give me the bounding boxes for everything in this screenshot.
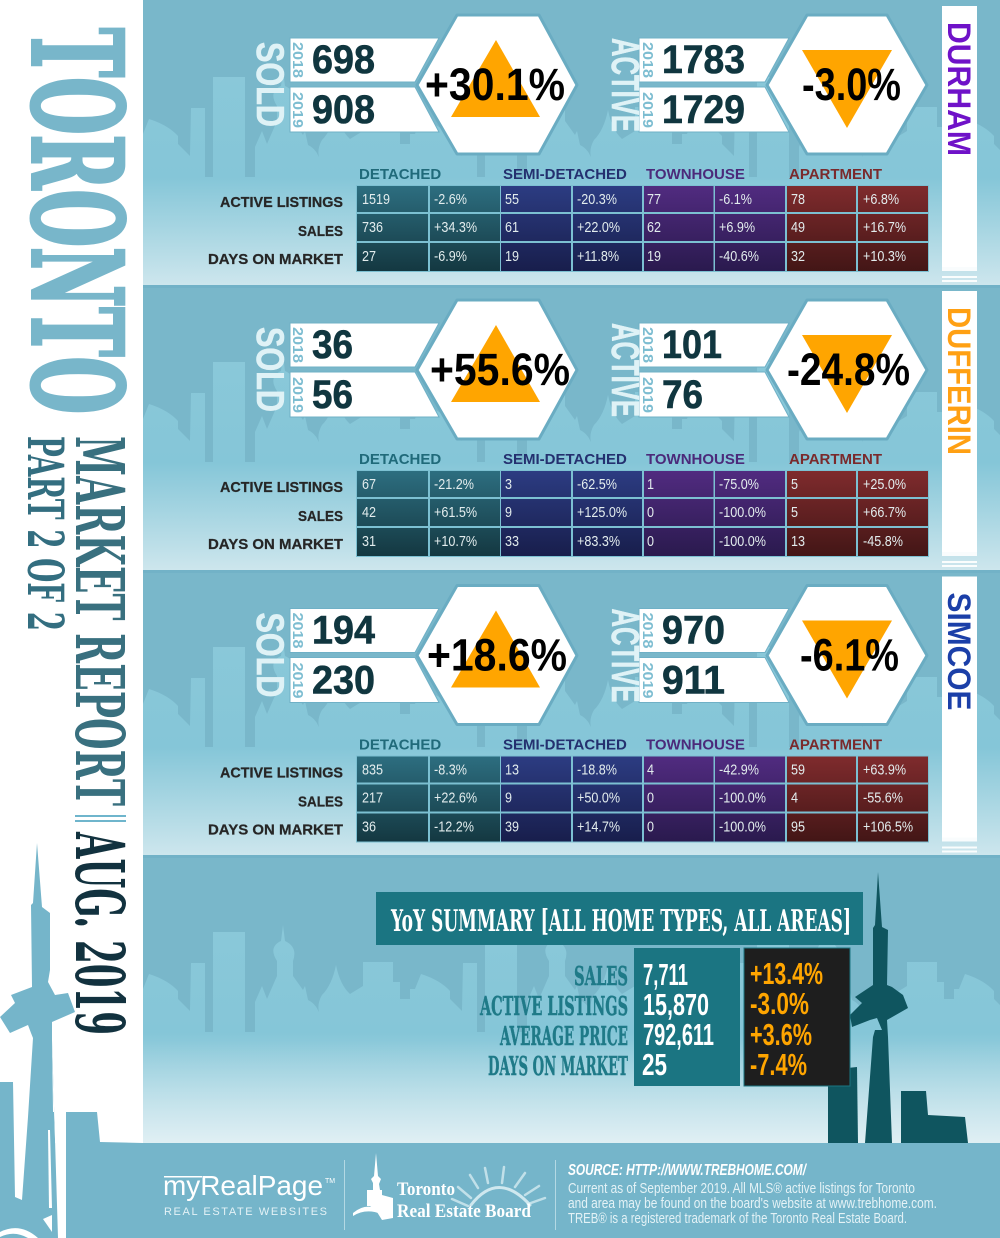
table: Simcoe: SEMI-DETACHED xyxy=(503,736,627,754)
table: Dufferin: 9 xyxy=(505,503,512,520)
active years: 2018 xyxy=(639,42,656,78)
left column blue CN Tower and skyline xyxy=(0,843,143,1238)
summary values box: 15,870 xyxy=(643,987,709,1022)
table: Simcoe: -8.3% xyxy=(434,760,467,778)
table: Simcoe: +106.5% xyxy=(863,817,913,835)
table: Simcoe: 4 xyxy=(647,760,654,778)
table: Dufferin: 3 xyxy=(505,475,512,492)
table: Dufferin: 5 xyxy=(791,475,798,492)
logo: myRealPage: TM xyxy=(325,1178,335,1185)
table: Simcoe: -42.9% xyxy=(719,760,759,778)
region label: Simcoe: SIMCOE xyxy=(941,592,977,710)
sold years: 2019 xyxy=(289,662,306,698)
title: Toronto: TORONTO xyxy=(3,28,148,414)
table: Simcoe: 95 xyxy=(791,817,805,835)
table: Durham: TOWNHOUSE xyxy=(646,166,745,183)
title: Aug. 2019: AUG. 2019 xyxy=(60,831,139,1035)
table: Dufferin: -45.8% xyxy=(863,532,903,549)
sold values xyxy=(312,323,353,417)
table: Durham: 62 xyxy=(647,218,661,235)
summary values box xyxy=(634,948,740,1086)
table: Durham: DETACHED xyxy=(359,166,441,183)
table: Durham: +10.3% xyxy=(863,247,906,264)
active change: down triangle: -6.1% xyxy=(800,630,899,680)
table: Dufferin: TOWNHOUSE xyxy=(646,451,745,468)
table: Durham: +6.8% xyxy=(863,190,899,207)
table: Simcoe: APARTMENT xyxy=(789,736,882,754)
active values xyxy=(662,38,745,132)
table: Durham: 77 xyxy=(647,190,661,207)
sold years: 2018 xyxy=(289,42,306,78)
sold label: SOLD xyxy=(248,42,291,127)
table: Dufferin: ACTIVE LISTINGS xyxy=(220,479,343,496)
summary change box: +13.4% xyxy=(750,956,823,991)
summary row labels xyxy=(479,962,628,1082)
table: Simcoe: -12.2% xyxy=(434,817,474,835)
region label: Dufferin: DUFFERIN xyxy=(941,307,977,455)
active change: down triangle xyxy=(787,335,910,413)
sold years: 2018 xyxy=(289,327,306,363)
logo: myRealPage: REAL ESTATE WEBSITES xyxy=(164,1206,327,1218)
table: Durham: SEMI-DETACHED xyxy=(503,166,627,183)
title divider xyxy=(75,815,126,822)
table: Simcoe: 36 xyxy=(362,817,376,835)
panel: Simcoe xyxy=(208,576,977,852)
table: Durham: 1519 xyxy=(362,190,390,207)
table: Durham: SALES xyxy=(298,223,343,240)
sold values xyxy=(312,608,376,702)
source note xyxy=(568,1162,937,1227)
table: Dufferin: -75.0% xyxy=(719,475,759,492)
active values xyxy=(662,608,725,702)
sold values: 194 xyxy=(312,608,376,652)
table: Simcoe: +63.9% xyxy=(863,760,906,778)
table: Dufferin: 13 xyxy=(791,532,805,549)
active years xyxy=(639,327,656,413)
sold years xyxy=(289,612,306,698)
active change: down triangle: -3.0% xyxy=(802,59,901,110)
source note: TREB® is a registered trademark of the Toronto Real Estate Board. xyxy=(568,1211,907,1227)
logo: myRealPage: myRealPage xyxy=(163,1170,323,1201)
active years: 2018 xyxy=(639,612,656,648)
active change: down triangle xyxy=(802,50,901,128)
table: Durham: DAYS ON MARKET xyxy=(208,251,343,268)
panel: Dufferin xyxy=(208,291,977,567)
active label: ACTIVE xyxy=(603,323,646,417)
table: Durham: -40.6% xyxy=(719,247,759,264)
table: Simcoe: -100.0% xyxy=(719,817,766,835)
table: Simcoe: -55.6% xyxy=(863,788,903,806)
table: Dufferin: +125.0% xyxy=(577,503,627,520)
sold values xyxy=(312,38,375,132)
table: Simcoe: SALES xyxy=(298,794,343,810)
table: Simcoe: +50.0% xyxy=(577,788,620,806)
active values: 1729 xyxy=(662,88,745,132)
table: Dufferin: -62.5% xyxy=(577,475,617,492)
active label: ACTIVE xyxy=(603,38,646,132)
table: Dufferin: 67 xyxy=(362,475,376,492)
table: Dufferin xyxy=(208,451,929,557)
panel: YoY summary xyxy=(376,892,863,1086)
table: Dufferin: -100.0% xyxy=(719,532,766,549)
panel backgrounds with skyline xyxy=(143,0,1000,1143)
summary change box xyxy=(744,948,850,1086)
table: Dufferin: DAYS ON MARKET xyxy=(208,536,343,553)
table: Durham: 78 xyxy=(791,190,805,207)
icon: dark CN Tower and buildings xyxy=(828,872,968,1143)
sold label: SOLD xyxy=(248,612,291,698)
sold values: 698 xyxy=(312,38,375,82)
sold change: up triangle: +18.6% xyxy=(427,630,567,680)
active label: ACTIVE xyxy=(603,608,646,702)
table: Dufferin: APARTMENT xyxy=(789,451,882,468)
table: Durham: +34.3% xyxy=(434,218,477,235)
table: Dufferin: 1 xyxy=(647,475,654,492)
table: Durham: 55 xyxy=(505,190,519,207)
table: Dufferin: -100.0% xyxy=(719,503,766,520)
summary values box: 7,711 xyxy=(643,957,688,992)
table: Simcoe: 217 xyxy=(362,788,383,806)
table: Durham: 736 xyxy=(362,218,383,235)
subtitle: part 2 of 2: PART 2 OF 2 xyxy=(16,436,75,631)
summary title bar xyxy=(376,892,863,945)
table: Dufferin: SEMI-DETACHED xyxy=(503,451,627,468)
table: Simcoe: -18.8% xyxy=(577,760,617,778)
sold change: up triangle xyxy=(425,40,565,117)
table: Simcoe xyxy=(208,736,929,842)
active years: 2019 xyxy=(639,377,656,413)
sold values: 36 xyxy=(312,323,353,367)
table: Durham: 49 xyxy=(791,218,805,235)
title: market report: MARKET REPORT xyxy=(60,436,139,806)
sold values: 230 xyxy=(312,658,375,702)
summary change box: -3.0% xyxy=(750,986,809,1021)
sold years: 2019 xyxy=(289,92,306,128)
active change: down triangle xyxy=(800,620,899,698)
active values: 970 xyxy=(662,608,725,652)
summary row labels: DAYS ON MARKET xyxy=(488,1052,628,1082)
table: Durham: 19 xyxy=(647,247,661,264)
table: Dufferin: +25.0% xyxy=(863,475,906,492)
table: Durham: 61 xyxy=(505,218,519,235)
sold years xyxy=(289,42,306,128)
sold years: 2018 xyxy=(289,612,306,648)
table: Simcoe: +14.7% xyxy=(577,817,620,835)
logo: myRealPage xyxy=(163,1170,335,1218)
table: Simcoe: +22.6% xyxy=(434,788,477,806)
sold values: 908 xyxy=(312,88,375,132)
active years: 2019 xyxy=(639,92,656,128)
sold change: up triangle xyxy=(430,325,570,402)
sold change: up triangle: +30.1% xyxy=(425,59,565,110)
table: Simcoe: DETACHED xyxy=(359,736,441,754)
summary change box: -7.4% xyxy=(750,1047,807,1082)
table: Durham: -6.9% xyxy=(434,247,467,264)
table: Simcoe: 835 xyxy=(362,760,383,778)
table: Durham: 32 xyxy=(791,247,805,264)
logo: Toronto Real Estate Board: Toronto xyxy=(397,1179,455,1200)
table: Durham: -6.1% xyxy=(719,190,752,207)
table: Durham: +22.0% xyxy=(577,218,620,235)
summary row labels: AVERAGE PRICE xyxy=(499,1022,628,1052)
table: Dufferin: 0 xyxy=(647,503,654,520)
table: Dufferin: -21.2% xyxy=(434,475,474,492)
sold change: up triangle: +55.6% xyxy=(430,344,570,395)
sold change: up triangle xyxy=(427,610,567,688)
table: Simcoe: ACTIVE LISTINGS xyxy=(220,764,343,782)
logo: Toronto Real Estate Board xyxy=(353,1153,545,1222)
table: Simcoe: 59 xyxy=(791,760,805,778)
region label: Durham: DURHAM xyxy=(941,22,977,156)
icon: logo tower xyxy=(367,1153,393,1220)
table: Dufferin: +66.7% xyxy=(863,503,906,520)
table: Simcoe: 13 xyxy=(505,760,519,778)
sold years: 2019 xyxy=(289,377,306,413)
table: Durham: APARTMENT xyxy=(789,166,882,183)
table: Simcoe: DAYS ON MARKET xyxy=(208,822,343,838)
table: Dufferin: SALES xyxy=(298,508,343,525)
table: Dufferin: +61.5% xyxy=(434,503,477,520)
table: Dufferin: 42 xyxy=(362,503,376,520)
panel: Durham xyxy=(208,6,977,282)
table: Durham: +16.7% xyxy=(863,218,906,235)
summary row labels: ACTIVE LISTINGS xyxy=(479,992,628,1022)
table: Durham: +11.8% xyxy=(577,247,619,264)
table: Durham: +6.9% xyxy=(719,218,755,235)
summary row labels: SALES xyxy=(574,962,628,992)
table: Simcoe: 0 xyxy=(647,788,654,806)
table: Dufferin: 0 xyxy=(647,532,654,549)
active values xyxy=(662,323,722,417)
sold years xyxy=(289,327,306,413)
footer band xyxy=(0,1143,1000,1238)
table: Durham: ACTIVE LISTINGS xyxy=(220,194,343,211)
divider xyxy=(344,1160,345,1230)
table: Durham: -20.3% xyxy=(577,190,617,207)
active years: 2019 xyxy=(639,662,656,698)
table: Dufferin: 5 xyxy=(791,503,798,520)
table: Simcoe: -100.0% xyxy=(719,788,766,806)
source note: Current as of September 2019. All MLS® active listings for Toronto xyxy=(568,1181,915,1197)
table: Dufferin: DETACHED xyxy=(359,451,441,468)
source note: SOURCE: HTTP://WWW.TREBHOME.COM/ xyxy=(568,1162,807,1179)
table: Durham: 27 xyxy=(362,247,376,264)
logo: Toronto Real Estate Board: Real Estate Board xyxy=(397,1201,531,1222)
left column white cut-outs xyxy=(0,1017,66,1238)
icon: logo sun arc and rays xyxy=(452,1167,545,1206)
active years xyxy=(639,612,656,698)
active years xyxy=(639,42,656,128)
summary change box: +3.6% xyxy=(750,1017,812,1052)
active values: 911 xyxy=(662,658,725,702)
table: Dufferin: 31 xyxy=(362,532,376,549)
active change: down triangle: -24.8% xyxy=(787,344,910,395)
table: Simcoe: TOWNHOUSE xyxy=(646,736,745,754)
sold label: SOLD xyxy=(248,327,291,412)
table: Durham: -2.6% xyxy=(434,190,467,207)
table: Simcoe: 0 xyxy=(647,817,654,835)
table: Simcoe: 9 xyxy=(505,788,512,806)
table: Simcoe: 39 xyxy=(505,817,519,835)
table: Durham: 19 xyxy=(505,247,519,264)
table: Dufferin: +10.7% xyxy=(434,532,477,549)
table: Dufferin: 33 xyxy=(505,532,519,549)
active years: 2018 xyxy=(639,327,656,363)
active values: 76 xyxy=(662,373,703,417)
table: Simcoe: 4 xyxy=(791,788,798,806)
active values: 1783 xyxy=(662,38,745,82)
divider xyxy=(555,1160,556,1230)
table: Durham xyxy=(208,166,929,272)
active values: 101 xyxy=(662,323,722,367)
summary values box: 25 xyxy=(642,1047,667,1082)
sold values: 56 xyxy=(312,373,353,417)
table: Dufferin: +83.3% xyxy=(577,532,620,549)
summary values box: 792,611 xyxy=(643,1017,714,1052)
